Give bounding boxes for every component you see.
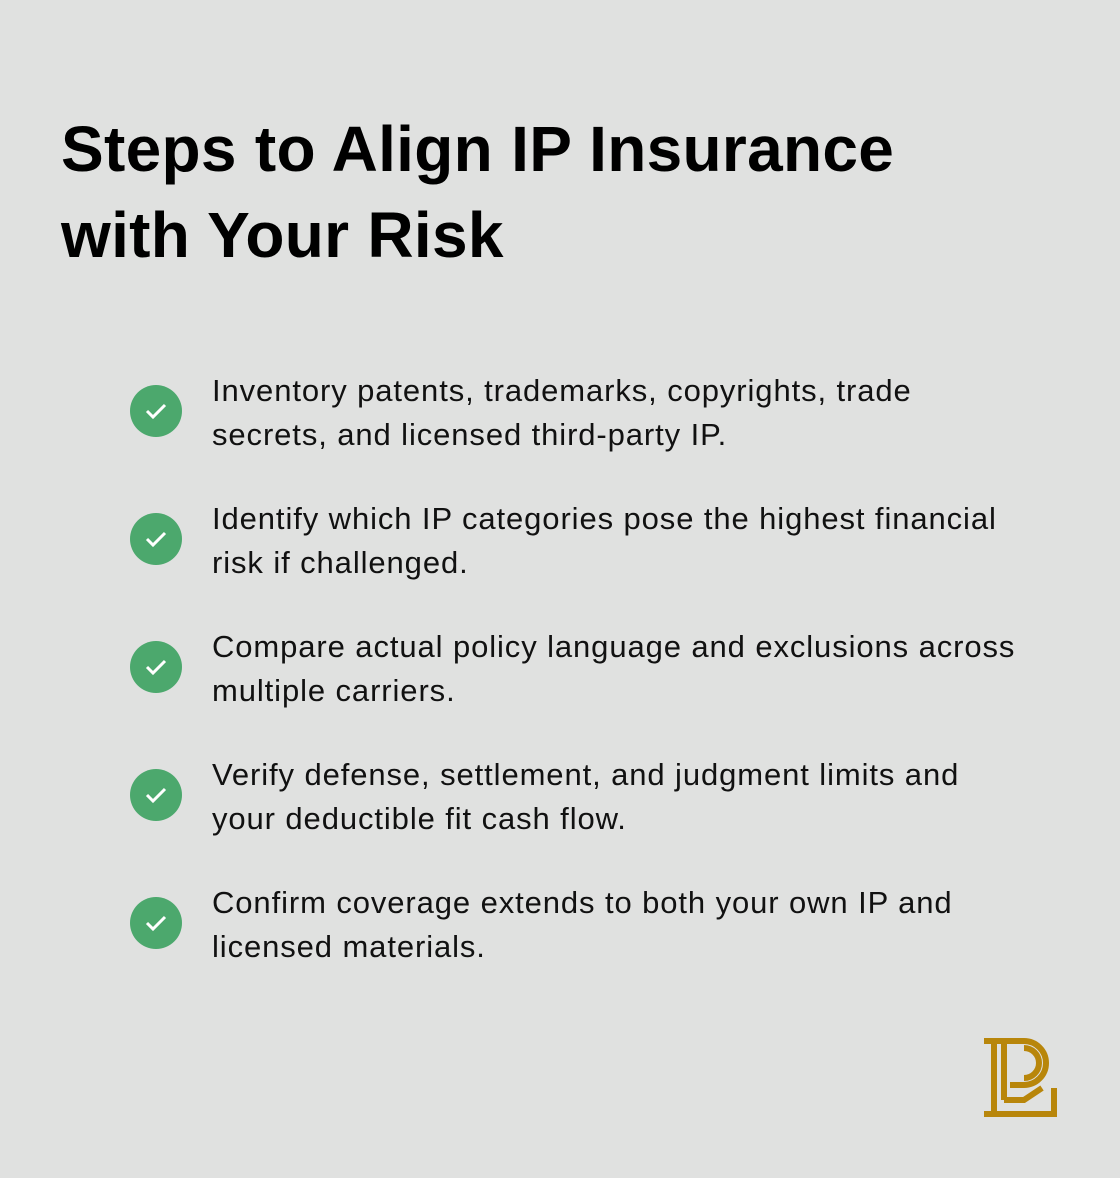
icon: check bbox=[130, 897, 182, 949]
text 4: Verify defense, settlement, and judgment limits and bbox=[212, 757, 959, 792]
icon: check bbox=[130, 641, 182, 693]
text 1: Inventory patents, trademarks, copyrights, trade bbox=[212, 373, 912, 408]
icon: check bbox=[130, 513, 182, 565]
text 1 bbox=[212, 373, 912, 452]
text 5: Confirm coverage extends to both your own IP and bbox=[212, 885, 953, 920]
text 4: your deductible fit cash flow. bbox=[212, 801, 627, 836]
item 4 bbox=[130, 757, 959, 836]
item 1 bbox=[130, 373, 912, 452]
item 3 bbox=[130, 629, 1015, 708]
text 3: multiple carriers. bbox=[212, 673, 456, 708]
text 2: risk if challenged. bbox=[212, 545, 469, 580]
item 5 bbox=[130, 885, 953, 964]
text 3: Compare actual policy language and exclusions across bbox=[212, 629, 1015, 664]
title: Steps to Align IP Insurance bbox=[61, 113, 894, 185]
title: with Your Risk bbox=[61, 199, 504, 271]
icon: check bbox=[130, 769, 182, 821]
text 5 bbox=[212, 885, 953, 964]
text 2 bbox=[212, 501, 997, 580]
logo bbox=[984, 1038, 1057, 1117]
text 2: Identify which IP categories pose the highest financial bbox=[212, 501, 997, 536]
text 5: licensed materials. bbox=[212, 929, 486, 964]
item 2 bbox=[130, 501, 997, 580]
title bbox=[60, 113, 894, 271]
icon: check bbox=[130, 385, 182, 437]
text 4 bbox=[212, 757, 959, 836]
text 1: secrets, and licensed third-party IP. bbox=[212, 417, 727, 452]
text 3 bbox=[212, 629, 1015, 708]
